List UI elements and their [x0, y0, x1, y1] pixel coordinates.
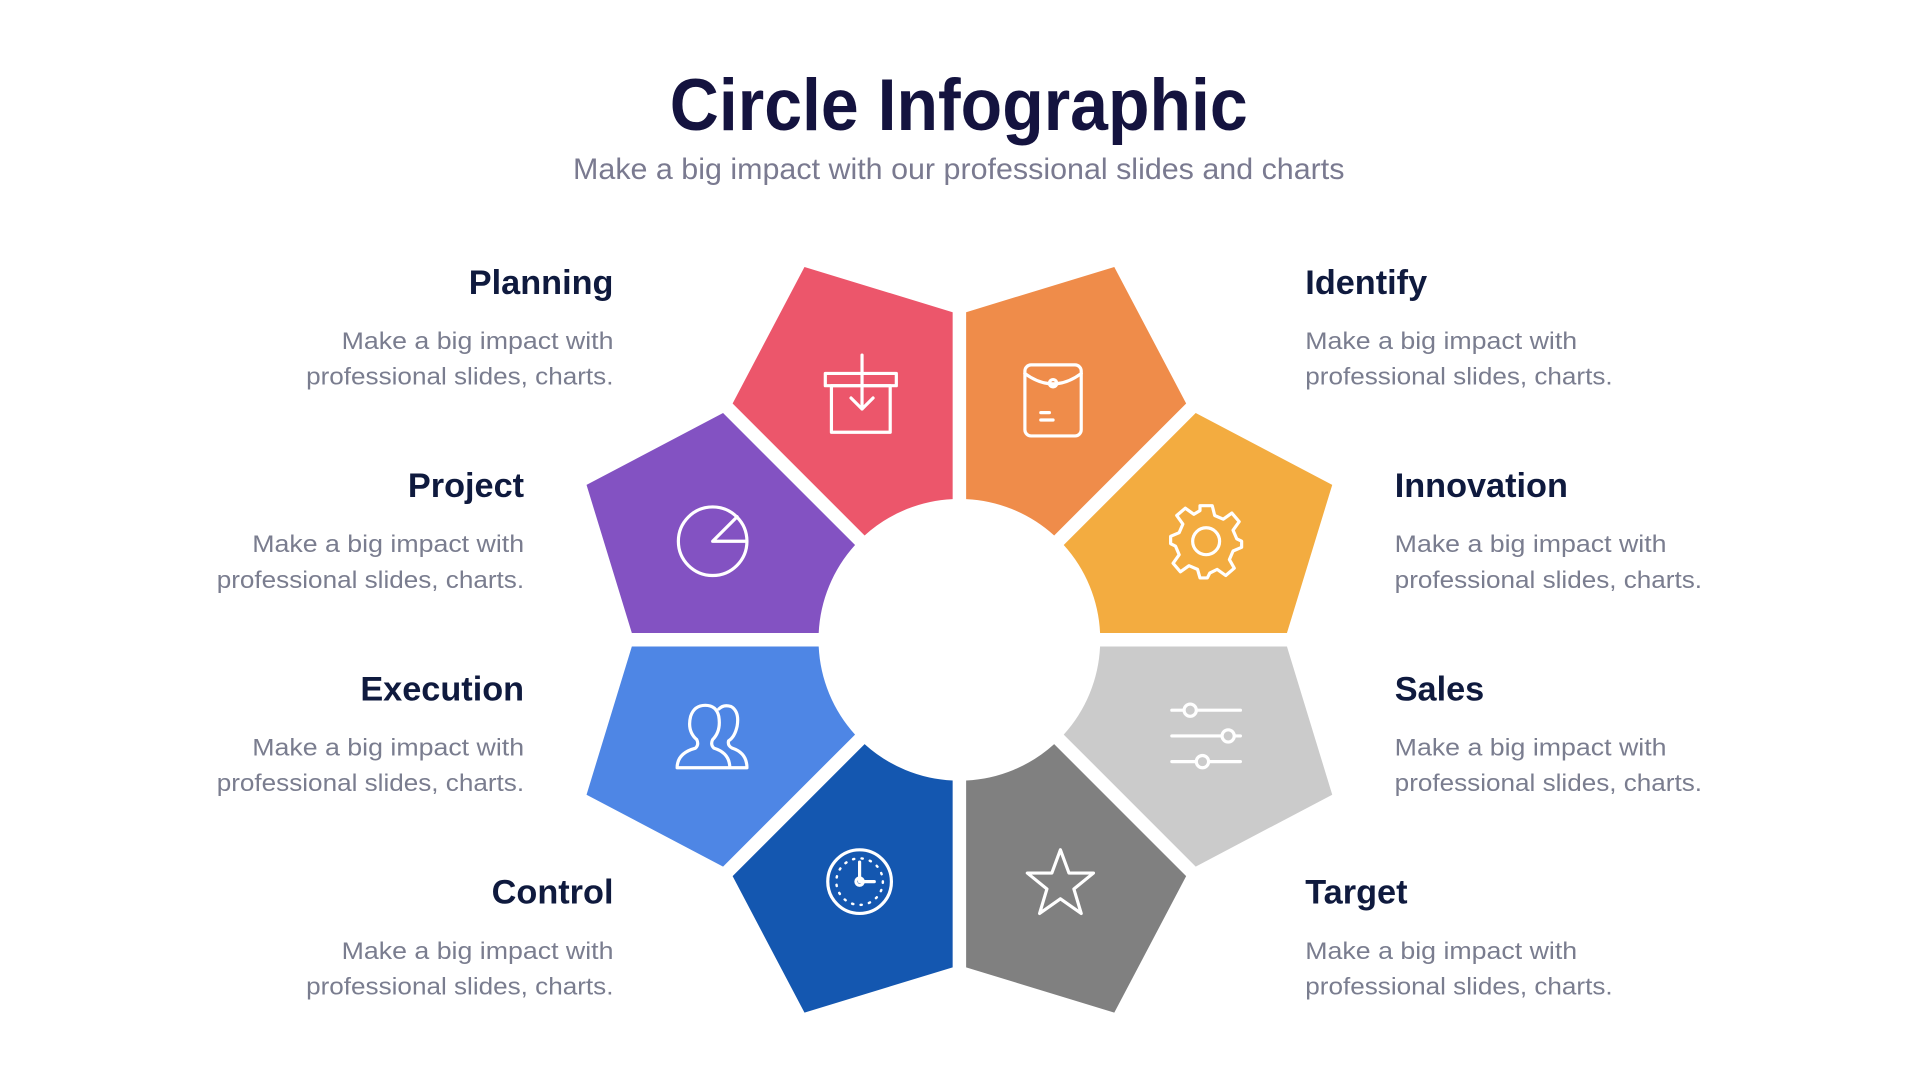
segment: control — [733, 744, 953, 1013]
segment: project — [587, 413, 855, 633]
icon: gear — [1171, 506, 1242, 578]
label: planning: professional slides, charts. — [306, 363, 613, 390]
label: planning — [306, 264, 613, 390]
icon: sliders — [1172, 704, 1240, 768]
icon: box download — [825, 355, 896, 432]
label: execution: professional slides, charts. — [217, 770, 524, 797]
label: execution: Make a big impact with — [252, 735, 524, 762]
label: project — [217, 467, 524, 594]
label: sales: Make a big impact with — [1395, 735, 1667, 762]
icon: envelope tablet — [1025, 365, 1081, 436]
icon: pie chart — [678, 507, 747, 576]
label: planning: Make a big impact with — [342, 328, 613, 355]
label: target: professional slides, charts. — [1305, 973, 1613, 1000]
label: target: Make a big impact with — [1305, 938, 1577, 965]
label: execution — [217, 670, 524, 797]
label: identify: Identify — [1305, 264, 1427, 302]
label: control: Make a big impact with — [342, 938, 613, 965]
label: control: Control — [492, 874, 613, 912]
icon: users — [677, 705, 747, 768]
label: identify — [1305, 264, 1613, 390]
label: target — [1305, 874, 1613, 1000]
label: sales — [1395, 670, 1702, 797]
label: control: professional slides, charts. — [306, 973, 613, 1000]
icon: clock — [828, 850, 891, 913]
circle diagram — [587, 267, 1332, 1013]
label: innovation — [1395, 467, 1702, 594]
subtitle: Make a big impact with our professional slides and charts — [573, 153, 1344, 186]
segment: sales — [1064, 647, 1332, 867]
label: execution: Execution — [360, 670, 524, 708]
segment: planning — [733, 267, 953, 535]
label: project: professional slides, charts. — [217, 567, 524, 594]
label: identify: Make a big impact with — [1305, 328, 1577, 355]
label: innovation: Make a big impact with — [1395, 531, 1667, 558]
label: target: Target — [1305, 874, 1407, 912]
label: sales: Sales — [1395, 670, 1484, 708]
label: identify: professional slides, charts. — [1305, 363, 1613, 390]
label: innovation: professional slides, charts. — [1395, 567, 1702, 594]
icon: star — [1027, 850, 1093, 913]
title: Circle Infographic — [670, 63, 1248, 146]
label: planning: Planning — [469, 264, 613, 302]
segment: execution — [587, 647, 855, 867]
label: project: Project — [408, 467, 524, 505]
label: innovation: Innovation — [1395, 467, 1568, 505]
label: sales: professional slides, charts. — [1395, 770, 1702, 797]
segment: innovation — [1064, 413, 1332, 633]
segment: target — [966, 744, 1186, 1013]
segment: identify — [966, 267, 1186, 535]
label: control — [306, 874, 613, 1000]
label: project: Make a big impact with — [252, 531, 524, 558]
